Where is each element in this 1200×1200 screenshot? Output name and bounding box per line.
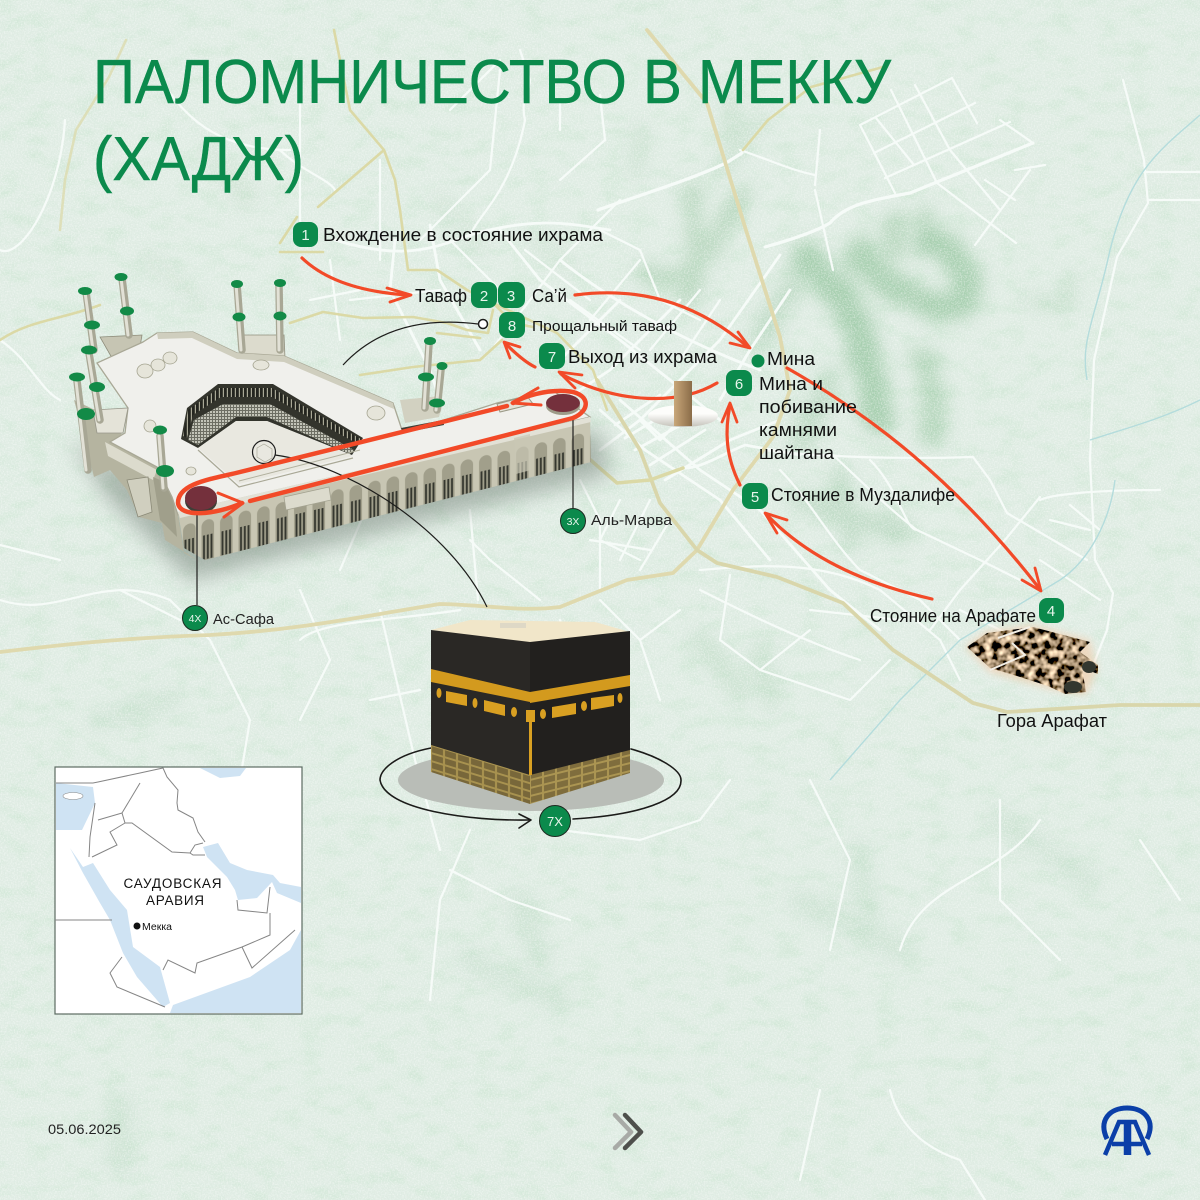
mosque: Masjid al-Haram [69, 273, 610, 580]
badge 3x: 3X [567, 516, 579, 528]
inset Mecca marker: Мекка [142, 922, 172, 933]
Kaaba leader origin marker [478, 320, 488, 328]
badge 7x: 7X [547, 814, 563, 829]
step labels: Са’й [532, 285, 567, 306]
badge 2 [471, 282, 497, 308]
step labels: Таваф [415, 285, 467, 306]
step labels: Аль-Марва [591, 513, 673, 529]
badge 7: 7 [548, 349, 556, 366]
minarets [69, 273, 448, 488]
north-east block [400, 396, 442, 423]
hills [100, 100, 1090, 1160]
badge 7x [540, 806, 570, 836]
red route arrows [178, 258, 1041, 599]
badge 1 [293, 222, 318, 247]
inset country label: АРАВИЯ [146, 893, 204, 908]
badges [182, 222, 1064, 836]
badge 4x: 4X [189, 613, 201, 625]
step labels: Прощальный таваф [532, 319, 677, 335]
Mount Arafat [965, 625, 1098, 695]
Kaaba roof [431, 620, 630, 643]
Kaaba [431, 620, 630, 804]
step labels: камнями [759, 419, 837, 440]
Al-Marwa disc [546, 394, 580, 415]
step labels [213, 224, 1108, 731]
inset country label [124, 876, 222, 908]
inset locator map [55, 767, 302, 1014]
Kaaba gold ornaments [436, 688, 622, 775]
inset seas [56, 768, 301, 1013]
step labels: шайтана [759, 442, 835, 463]
step labels: побивание [759, 396, 857, 417]
badge 4 [1039, 598, 1064, 623]
arrow: Sa'i loop [178, 388, 586, 517]
badge 2: 2 [480, 288, 488, 305]
As-Safa disc [185, 486, 217, 513]
arrow: 7 to 8 [504, 342, 535, 367]
arrow: 1 to Tawaf [302, 258, 411, 302]
inset country label: САУДОВСКАЯ [124, 876, 222, 891]
rear minaret blocks [100, 335, 142, 358]
left wall and towers [74, 400, 201, 562]
badge 4: 4 [1047, 603, 1055, 620]
step labels: Мина и [759, 373, 823, 394]
circling arrow path [380, 748, 681, 828]
step labels: Вхождение в состояние ихрама [323, 224, 604, 245]
Kaaba gold belt [431, 669, 530, 702]
step labels: Стояние в Муздалифе [771, 484, 955, 505]
courtyard [181, 384, 363, 487]
badge 3x [560, 508, 586, 534]
arrow: Sa'i to Mina [575, 293, 750, 348]
leader lines [197, 322, 573, 607]
date: 05.06.2025 [48, 1122, 121, 1137]
title: ПАЛОМНИЧЕСТВО В МЕККУ [93, 48, 892, 117]
step labels: Выход из ихрама [568, 346, 718, 367]
badge 3 [498, 282, 525, 308]
inset borders [55, 768, 295, 1007]
tower blocks on facade [284, 487, 331, 510]
corner block [93, 408, 128, 433]
small domes [137, 352, 385, 475]
step labels: Мина [767, 348, 816, 369]
badge 6: 6 [735, 376, 743, 393]
arrow: Mina to 4 [787, 368, 1041, 591]
badge 3: 3 [507, 288, 515, 305]
badge 8 [499, 312, 525, 338]
blue wadis [830, 115, 1200, 780]
main roof [97, 332, 590, 515]
circling Kaaba shadow [398, 749, 664, 811]
badge 8: 8 [508, 318, 516, 335]
Kaaba black cloth [431, 630, 530, 775]
step labels: Гора Арафат [997, 710, 1108, 731]
arrow: 4 to 5 [765, 513, 932, 599]
title [93, 48, 892, 194]
title: (ХАДЖ) [93, 125, 304, 194]
step labels: Стояние на Арафате [870, 605, 1036, 626]
badge 1: 1 [301, 227, 310, 244]
Mina dot [752, 354, 764, 368]
arm facade with arches [178, 417, 591, 560]
badge 5: 5 [751, 489, 759, 506]
Jamarat pillar [648, 381, 718, 427]
logo: Anadolu Agency [1104, 1108, 1150, 1155]
Kaaba brick base [431, 743, 530, 804]
badge 5 [742, 483, 768, 509]
icon: next chevrons [615, 1115, 641, 1148]
badge 6 [726, 370, 752, 396]
Cyprus [63, 792, 83, 800]
arrow: 6 to 7 [559, 372, 717, 399]
badge 7 [539, 343, 565, 369]
step labels: Ас-Сафа [213, 612, 275, 628]
arrow: 5 to 6 [722, 403, 740, 485]
mosque shadow [70, 430, 610, 580]
mini Kaaba [252, 440, 276, 464]
badge 4x [182, 606, 208, 630]
yellow main roads [0, 30, 1200, 712]
